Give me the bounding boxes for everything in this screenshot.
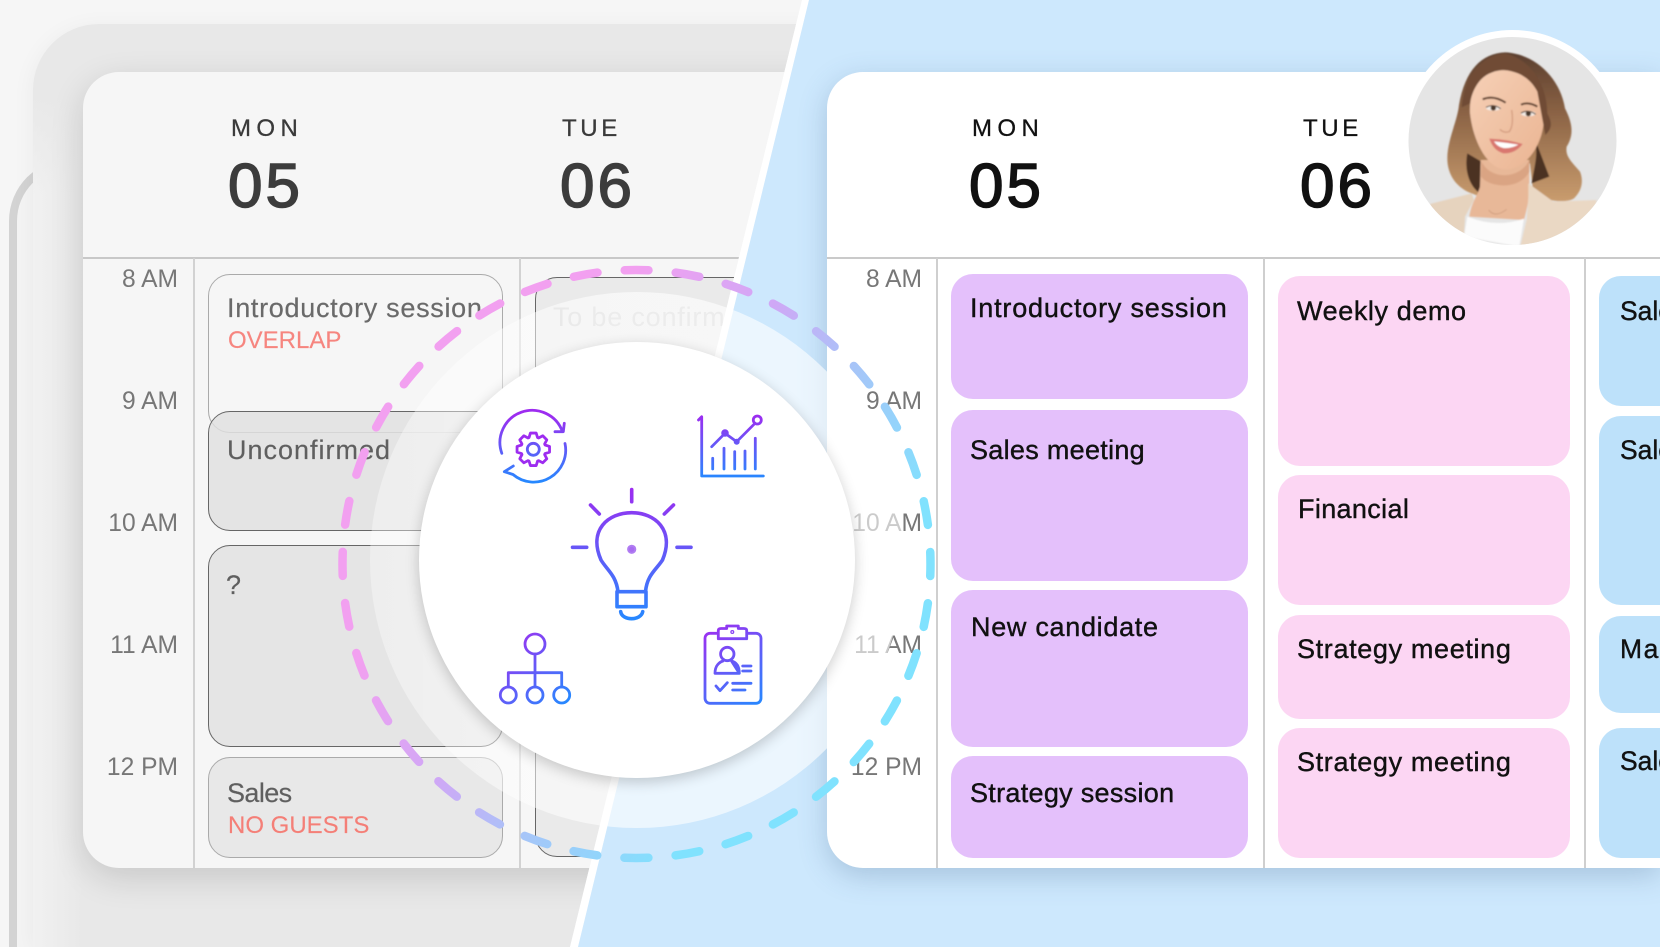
day label: MON: MON	[972, 115, 1044, 142]
panel: grey calendar card	[72, 70, 784, 890]
time: 10 AM: 10 AM	[108, 510, 178, 537]
event: New candidate	[951, 590, 1248, 747]
label: ?: ?	[226, 570, 242, 600]
event: Introductory session	[951, 274, 1248, 399]
event: Sales	[1599, 276, 1660, 406]
time: 8 AM: 8 AM	[866, 266, 922, 293]
label: Strategy session: Strategy session	[970, 778, 1174, 808]
label: Financial: Financial	[1298, 494, 1409, 524]
time: 8 AM: 8 AM	[122, 266, 178, 293]
panel: before (grey, chaotic calendar)	[9, 24, 796, 947]
label: New candidate: New candidate	[971, 612, 1159, 642]
day label: TUE: TUE	[1303, 115, 1362, 142]
event: Sales	[1599, 728, 1660, 858]
label: Strategy meeting: Strategy meeting	[1297, 747, 1512, 777]
event: Introductory session, overlap	[208, 274, 503, 433]
event: Unconfirmed	[208, 411, 503, 531]
avatar: smiling woman portrait	[1408, 30, 1616, 245]
date: 05: 05	[969, 152, 1044, 221]
warning: NO GUESTS: NO GUESTS	[228, 812, 369, 839]
column divider	[936, 258, 938, 868]
label: Sales: Sales	[227, 778, 292, 808]
day label: MON: MON	[231, 115, 303, 142]
event: Financial	[1278, 475, 1570, 605]
panel: after (blue, organised calendar)	[578, 0, 1660, 947]
icon: gear with cycle arrows	[500, 410, 566, 482]
time: 9 AM: 9 AM	[866, 388, 922, 415]
date: 06: 06	[1300, 152, 1375, 221]
column divider	[1263, 258, 1264, 868]
event: Weekly demo	[1278, 276, 1570, 466]
translucent halo around the centre	[370, 292, 904, 828]
label: Introductory session: Introductory session	[970, 293, 1228, 323]
column divider	[193, 258, 194, 868]
time: 11 AM: 11 AM	[110, 632, 178, 659]
event: question mark	[208, 545, 503, 747]
middle stacked panel	[33, 24, 796, 947]
label: Strategy meeting: Strategy meeting	[1297, 634, 1512, 664]
back stacked panel	[9, 172, 33, 947]
header divider	[827, 257, 1660, 259]
day label: TUE: TUE	[562, 115, 621, 142]
event: Sales meeting	[951, 410, 1248, 581]
label: Weekly demo: Weekly demo	[1297, 296, 1467, 326]
event: Sales, no guests	[208, 757, 503, 858]
date: 05: 05	[228, 152, 303, 221]
warning: OVERLAP: OVERLAP	[228, 327, 341, 354]
date: 06: 06	[560, 152, 635, 221]
central white circle	[419, 342, 855, 778]
label: To be confirmed: To be confirmed	[553, 302, 757, 332]
time: 12 PM: 12 PM	[107, 754, 178, 781]
icon: clipboard with profile	[705, 626, 761, 703]
event: Marketing	[1599, 616, 1660, 713]
icon: org chart	[500, 634, 570, 703]
event: To be confirmed	[535, 277, 734, 857]
diagonal divider	[570, 0, 808, 947]
panel: white calendar card	[827, 72, 1660, 868]
time: 9 AM: 9 AM	[122, 388, 178, 415]
icon: growth chart	[698, 416, 763, 476]
column divider	[519, 258, 520, 868]
column divider	[1584, 258, 1586, 868]
label: Introductory session: Introductory session	[227, 293, 483, 323]
time: 11 AM: 11 AM	[854, 632, 922, 659]
icon: light bulb	[572, 490, 691, 619]
time: 12 PM: 12 PM	[851, 754, 922, 781]
event: Sales	[1599, 416, 1660, 605]
event: Strategy meeting	[1278, 615, 1570, 719]
label: Sales meeting: Sales meeting	[970, 435, 1145, 465]
event: Strategy session	[951, 756, 1248, 858]
label: Unconfirmed: Unconfirmed	[227, 435, 391, 465]
header divider	[83, 257, 739, 259]
event: Strategy meeting	[1278, 728, 1570, 858]
time: 10 AM: 10 AM	[852, 510, 922, 537]
